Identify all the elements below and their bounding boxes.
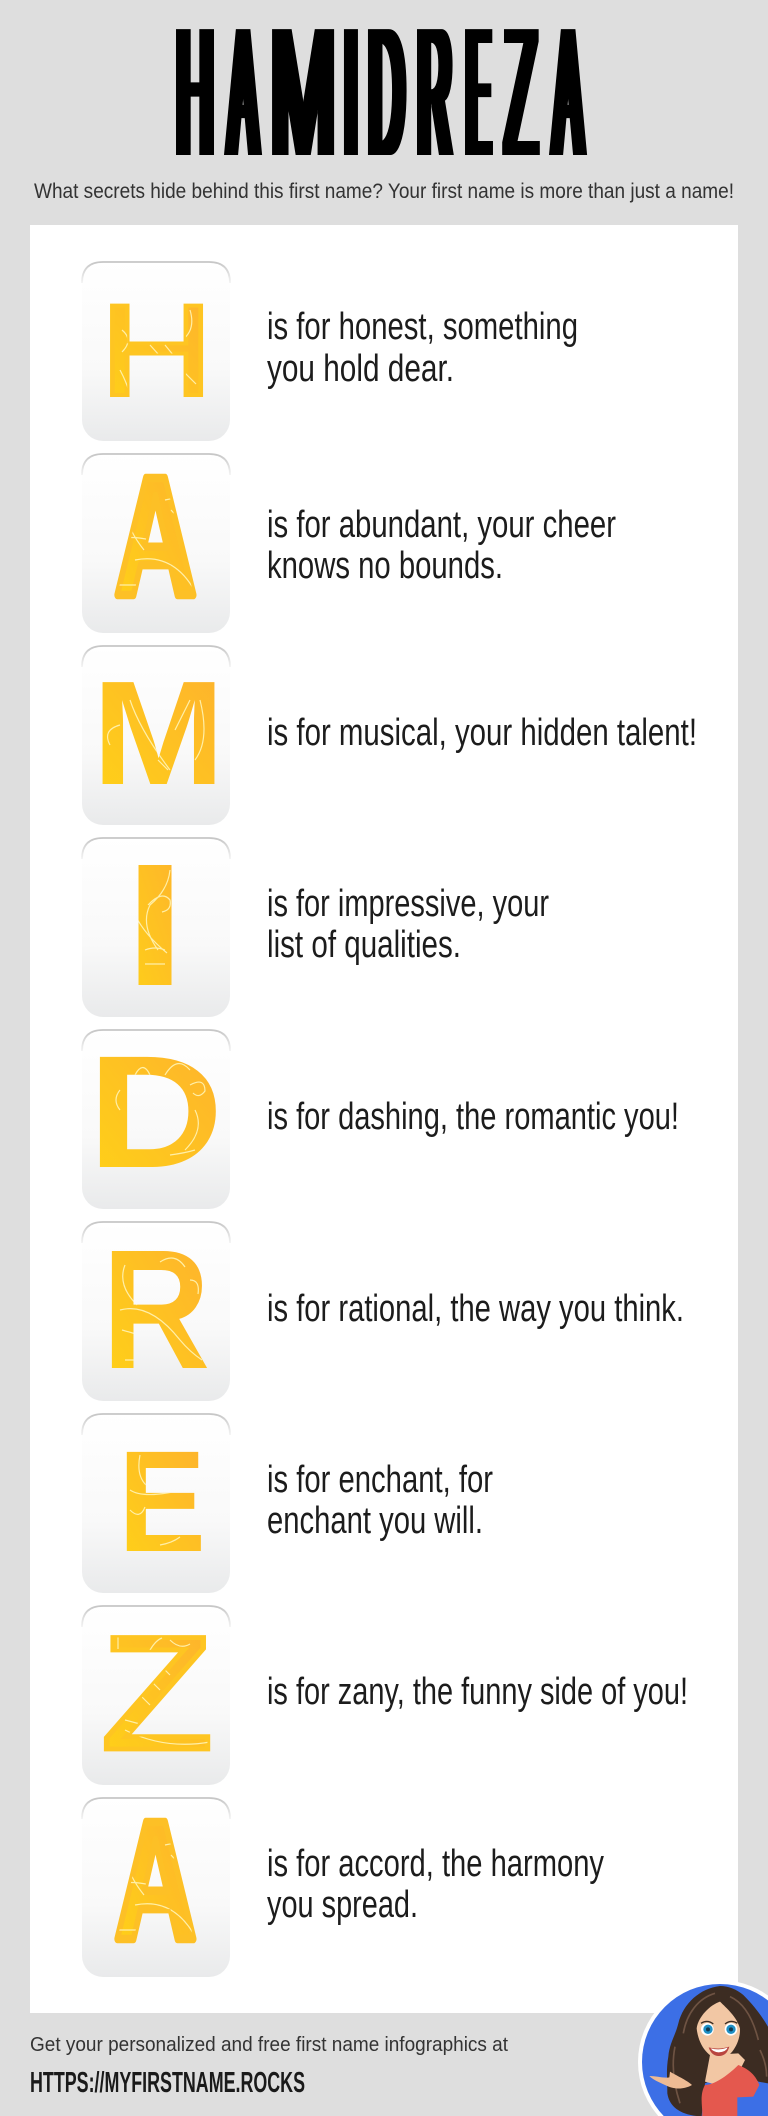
avatar [638,1980,768,2116]
letter: H: H [99,277,214,423]
row: H [82,261,578,441]
description: I [267,883,549,966]
letter: R [112,1251,207,1368]
description: H: you hold dear. [267,348,454,390]
footer url: HTTPS://MYFIRSTNAME.ROCKS [30,2067,305,2099]
letter: R: R [102,1214,210,1404]
row: A [82,441,616,633]
tile: R [82,1221,230,1401]
row: A (last) [82,1785,604,1977]
letter: A (last) [114,1818,196,1944]
tile: A (last) [82,1797,230,1977]
letter: I: I [123,828,187,1023]
letter: H [110,304,204,397]
description: I: list of qualities. [267,924,461,966]
letter: Z: Z [101,1602,213,1784]
description: E: is for enchant, for [267,1459,493,1501]
letter: A [114,474,196,600]
letter: M [102,682,214,784]
description: E: enchant you will. [267,1500,483,1542]
row: E [82,1413,493,1593]
tile: Z [82,1605,230,1785]
tile: A [82,453,230,633]
letter: M: M [92,650,225,816]
description: I: is for impressive, your [267,883,549,925]
panel: letters [30,225,738,2013]
letter: D [100,1056,216,1167]
description: E [267,1459,493,1542]
letter: A: A [114,441,197,631]
letter: A (last): A [114,1785,197,1975]
footer prompt: Get your personalized and free first name infographics at [30,2034,508,2056]
row: I [82,828,549,1023]
description: A (last): you spread. [267,1884,418,1926]
row: Z [82,1602,688,1785]
tile: E [82,1413,230,1593]
letter: Z [104,1635,210,1752]
description: A: knows no bounds. [267,545,503,587]
tile: H [82,261,230,441]
tile: D [82,1029,230,1209]
letter: D: D [87,1023,224,1202]
description: H [267,306,578,390]
letter: E [126,1452,201,1551]
row: D [82,1023,679,1209]
tile: I [82,837,230,1017]
description: A (last) [267,1843,604,1926]
description: A (last): is for accord, the harmony [267,1843,604,1885]
description: A [267,504,616,587]
tile: M [82,645,230,825]
letter: E: E [118,1422,206,1582]
description: H: is for honest, something [267,306,578,348]
row: R [82,1214,684,1404]
description: A: is for abundant, your cheer [267,504,616,546]
row: M [82,645,697,825]
letter: I [138,865,172,985]
